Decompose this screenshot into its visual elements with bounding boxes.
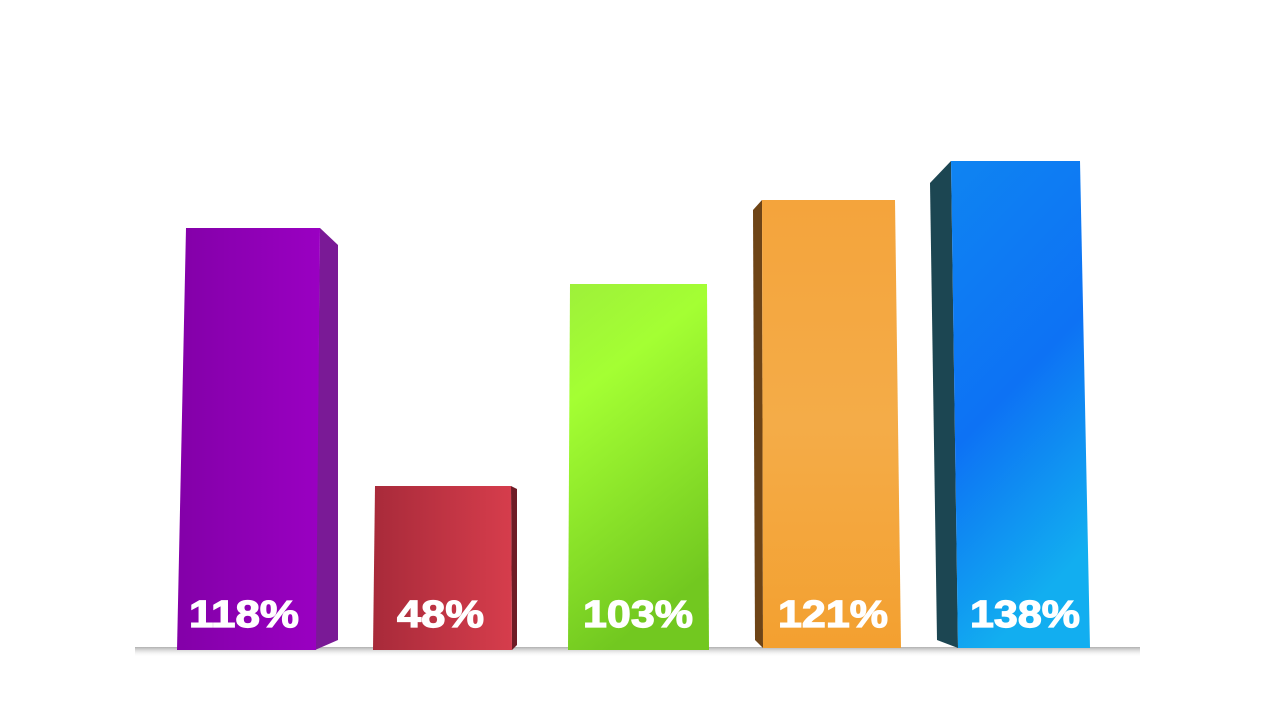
- label 118%: 118%: [189, 594, 299, 636]
- bar: 48% red: [373, 486, 517, 650]
- bar: 103% green: [568, 284, 709, 650]
- bar: 118% purple: [177, 228, 338, 650]
- label 48%: 48%: [397, 594, 484, 636]
- label 103%: 103%: [583, 594, 693, 636]
- label 121%: 121%: [778, 594, 888, 636]
- label 138%: 138%: [970, 594, 1080, 636]
- bar: 138% blue: [930, 161, 1090, 648]
- bar: 121% orange: [753, 200, 901, 648]
- floor shadow: [135, 647, 1140, 657]
